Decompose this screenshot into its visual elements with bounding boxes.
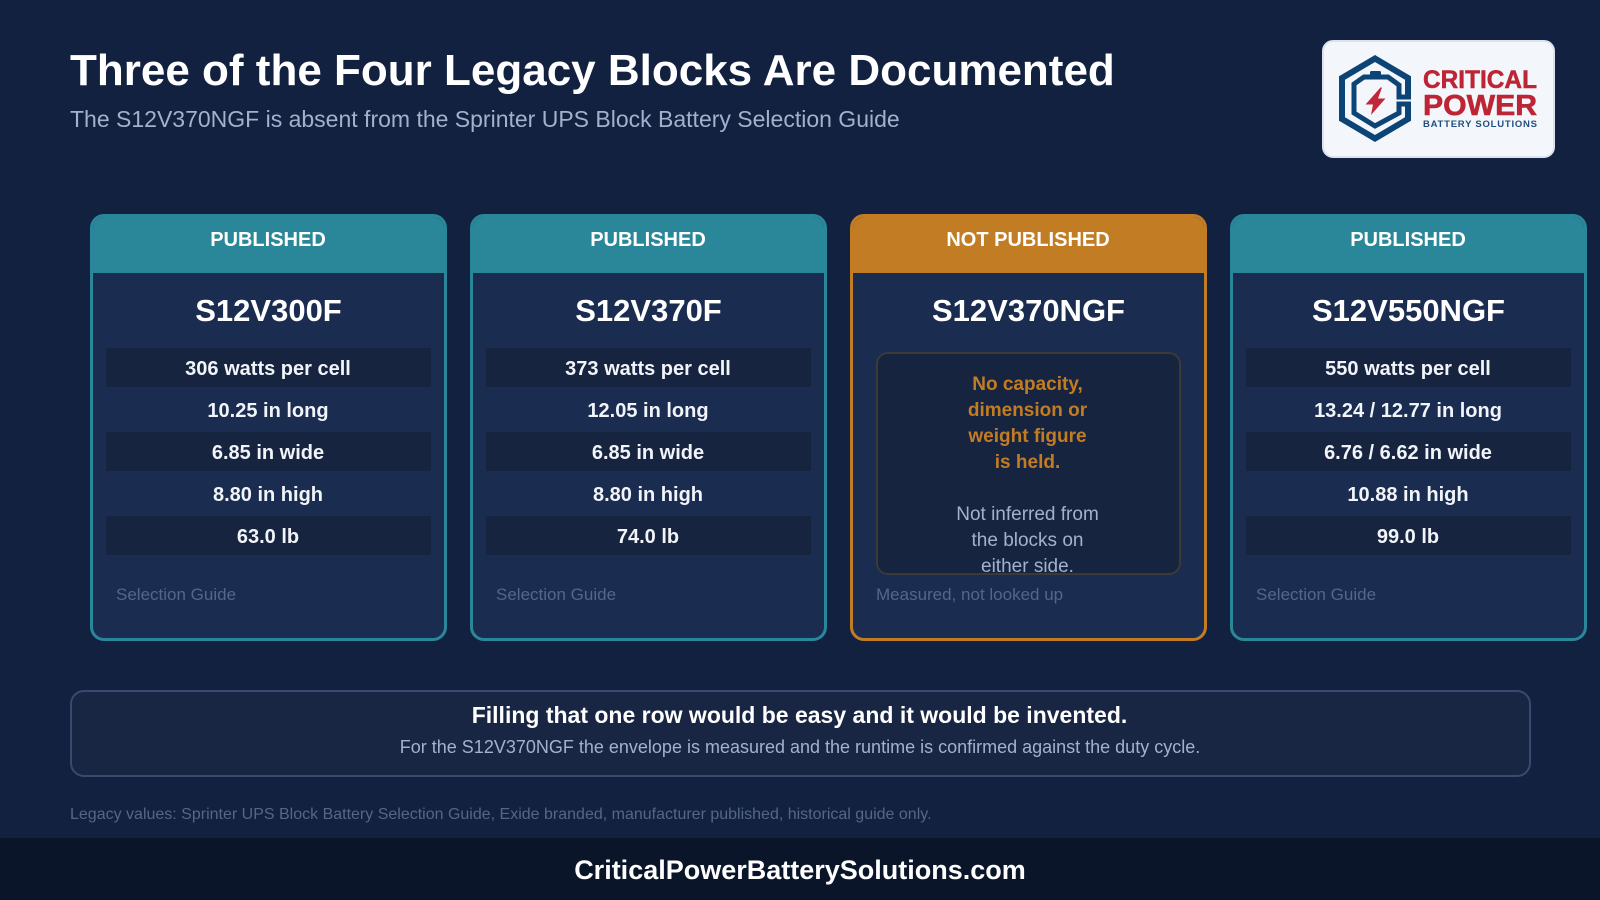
spec: watts: 550 watts per cell — [1325, 358, 1491, 380]
spec: length: 13.24 / 12.77 in long — [1314, 400, 1502, 422]
spec: watts: 306 watts per cell — [185, 358, 351, 380]
spec: weight: 99.0 lb — [1377, 526, 1439, 548]
panel: S12V300F — [90, 214, 447, 641]
callout headline: weight figure — [968, 426, 1087, 447]
status banner: PUBLISHED — [1350, 229, 1466, 251]
status banner: PUBLISHED — [210, 229, 326, 251]
panel: S12V370NGF — [850, 214, 1207, 641]
status banner — [90, 214, 447, 273]
status banner — [470, 214, 827, 273]
spec: watts — [106, 348, 431, 387]
panel: S12V550NGF — [1230, 214, 1587, 641]
status banner — [1230, 214, 1587, 273]
source note: Selection Guide — [116, 585, 236, 604]
spec: width — [106, 432, 431, 471]
logo wordmark: BATTERY SOLUTIONS — [1423, 119, 1537, 130]
callout: no figures held — [876, 352, 1181, 575]
status banner — [850, 214, 1207, 273]
callout headline: is held. — [995, 452, 1060, 473]
icon: hexagon battery — [1342, 58, 1411, 138]
model name: S12V300F — [195, 293, 342, 328]
logo wordmark: CRITICAL — [1423, 66, 1537, 94]
spec: height: 8.80 in high — [213, 484, 323, 506]
callout headline: No capacity, — [972, 374, 1083, 395]
spec: width: 6.85 in wide — [592, 442, 704, 464]
spec: weight — [106, 516, 431, 555]
source note: Measured, not looked up — [876, 585, 1063, 604]
source line: Legacy values: Sprinter UPS Block Battery Selection Guide, Exide branded, manufacturer published, historical guide only. — [70, 806, 932, 823]
spec: watts: 373 watts per cell — [565, 358, 731, 380]
spec: weight: 63.0 lb — [237, 526, 299, 548]
callout body: the blocks on — [972, 530, 1083, 551]
subtitle: The S12V370NGF is absent from the Sprinter UPS Block Battery Selection Guide — [70, 106, 900, 132]
spec: watts — [1246, 348, 1571, 387]
title: Three of the Four Legacy Blocks Are Documented — [70, 46, 1115, 95]
model name: S12V550NGF — [1312, 293, 1505, 328]
logo: Critical Power Battery Solutions — [1322, 40, 1555, 158]
model name: S12V370NGF — [932, 293, 1125, 328]
spec: height: 8.80 in high — [593, 484, 703, 506]
model name: S12V370F — [575, 293, 722, 328]
spec: width: 6.76 / 6.62 in wide — [1324, 442, 1492, 464]
spec: weight: 74.0 lb — [617, 526, 679, 548]
spec: length: 10.25 in long — [207, 400, 329, 422]
spec: height: 10.88 in high — [1347, 484, 1469, 506]
spec: width — [1246, 432, 1571, 471]
spec: watts — [486, 348, 811, 387]
callout text: For the S12V370NGF the envelope is measured and the runtime is confirmed against the duty cycle. — [400, 737, 1200, 757]
spec: weight — [486, 516, 811, 555]
panel: S12V370F — [470, 214, 827, 641]
source note: Selection Guide — [1256, 585, 1376, 604]
callout body: Not inferred from — [956, 504, 1099, 525]
status banner: NOT PUBLISHED — [946, 229, 1110, 251]
spec: weight — [1246, 516, 1571, 555]
callout headline: dimension or — [968, 400, 1087, 421]
source note: Selection Guide — [496, 585, 616, 604]
spec: length: 12.05 in long — [587, 400, 709, 422]
spec: width: 6.85 in wide — [212, 442, 324, 464]
status banner: PUBLISHED — [590, 229, 706, 251]
footer bar: CriticalPowerBatterySolutions.com — [574, 855, 1026, 885]
logo wordmark: POWER — [1423, 90, 1537, 122]
logo wordmark — [1423, 66, 1537, 130]
footer bar — [0, 838, 1600, 900]
callout heading: Filling that one row would be easy and it would be invented. — [472, 702, 1127, 728]
callout headline — [968, 374, 1087, 473]
callout body — [956, 504, 1099, 575]
spec: width — [486, 432, 811, 471]
callout: invented row warning — [70, 690, 1531, 777]
